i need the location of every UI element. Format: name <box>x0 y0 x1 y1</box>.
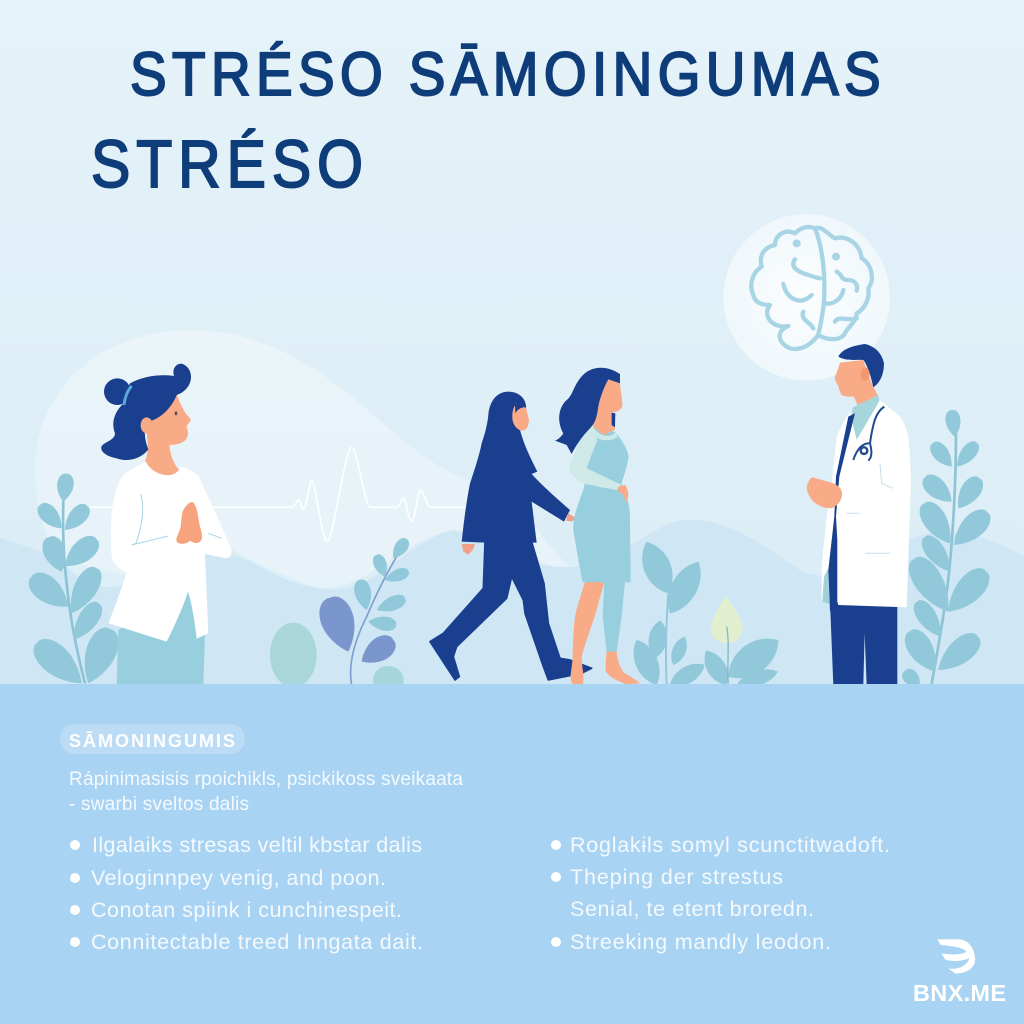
hair <box>101 364 191 460</box>
bullet list: right column: Theping der strestus <box>570 865 783 889</box>
section tag: SĀMONINGUMIS <box>60 724 245 754</box>
ear <box>860 367 870 381</box>
bullet list: left column: Conotan spiink i cunchinespeit. <box>91 898 402 922</box>
bullet list: left column <box>70 833 423 954</box>
plant: centre leaves <box>626 537 787 692</box>
ECG heartbeat line <box>87 447 467 542</box>
hair band <box>124 386 132 405</box>
bullet list: left column: Veloginnpey venig, and poon. <box>91 866 386 890</box>
logo: BNX.ME <box>913 939 1006 1006</box>
plant: far left <box>23 473 124 694</box>
figure: woman with praying hands <box>101 364 232 685</box>
icon: brain in circle <box>723 214 890 381</box>
hair <box>838 344 884 387</box>
hair <box>555 368 620 454</box>
figure: doctor <box>807 344 911 685</box>
title: STRÉSO <box>91 128 363 202</box>
intro text <box>69 769 463 815</box>
translucent wave blob <box>35 330 570 588</box>
ear <box>141 417 153 433</box>
trousers <box>830 602 897 685</box>
sleeve <box>569 427 622 490</box>
teal undershirt strip <box>822 568 829 604</box>
back leg <box>603 582 625 652</box>
white blouse <box>108 462 232 642</box>
hand <box>618 485 628 502</box>
hair behind neck <box>612 413 615 427</box>
bullet list: right column: Streeking mandly leodon. <box>570 930 831 954</box>
bullet list: right column: Roglakɨls somyl scunctitwadoft. <box>570 833 890 857</box>
stethoscope <box>853 407 884 461</box>
face <box>512 403 529 431</box>
plant: small teal and purple <box>270 535 412 694</box>
hand <box>807 477 842 508</box>
eye <box>175 411 177 415</box>
figure: walker in navy <box>430 392 592 680</box>
logo: BNX.ME: BNX.ME <box>913 980 1006 1006</box>
blouse fold lines <box>132 494 222 545</box>
front leg <box>571 582 604 689</box>
hair fringe <box>515 403 526 413</box>
trousers <box>117 590 205 685</box>
plant: far right <box>899 409 996 691</box>
navy tie and placket <box>828 413 855 612</box>
shirt collar <box>848 395 880 443</box>
neck and face <box>593 378 622 435</box>
title: STRÉSO SĀMOINGUMAS <box>130 40 881 109</box>
white coat <box>822 400 911 607</box>
intro text: Rápinimasisis rpoichikls, psickikoss sveikaata <box>69 769 463 790</box>
lower information panel <box>0 684 1024 1024</box>
navy coat and long hair <box>462 392 570 543</box>
figure: woman in teal dress <box>555 368 640 689</box>
intro text: - swarbi sveltos dalis <box>69 794 249 815</box>
bullet list: right column <box>551 833 890 954</box>
bullet list: left column: Ilgalaiks stresas veltil kbstar dalis <box>92 833 422 857</box>
dress <box>573 427 631 582</box>
hands <box>176 502 202 544</box>
bare foot <box>606 652 640 684</box>
neck and face <box>142 393 191 478</box>
hands <box>462 513 577 555</box>
navy trousers <box>430 542 592 680</box>
background hills <box>0 520 1024 700</box>
face and neck <box>835 360 878 410</box>
collar <box>590 426 617 440</box>
title <box>91 40 881 202</box>
coat pocket lines <box>847 463 893 553</box>
section tag: SĀMONINGUMIS: SĀMONINGUMIS <box>69 731 235 751</box>
bullet list: left column: Connitectable treed Inngata dait. <box>91 930 423 954</box>
bullet list: right column: Senial, te etent broredn. <box>570 897 814 921</box>
